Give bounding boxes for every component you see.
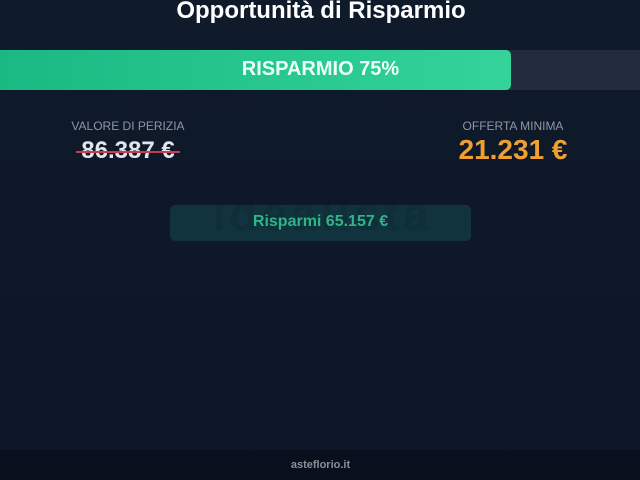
appraisal amount struck through: 86.387 € (81, 137, 175, 164)
minimum offer amount: 21.231 € (458, 134, 568, 165)
footer (0, 450, 640, 480)
progress bar (0, 50, 640, 90)
savings text: Risparmi 65.157 € (253, 213, 388, 230)
savings badge (170, 205, 471, 241)
footer website: asteflorio.it (291, 459, 350, 471)
minimum offer block (458, 119, 568, 165)
strikethrough line (76, 151, 180, 153)
appraisal value block (71, 119, 185, 164)
minimum offer label: OFFERTA MINIMA (463, 119, 563, 133)
watermark: idealista (212, 188, 433, 240)
progress label: RISPARMIO 75% (242, 58, 399, 80)
progress bar fill (0, 50, 511, 90)
appraisal label: VALORE DI PERIZIA (71, 119, 185, 133)
